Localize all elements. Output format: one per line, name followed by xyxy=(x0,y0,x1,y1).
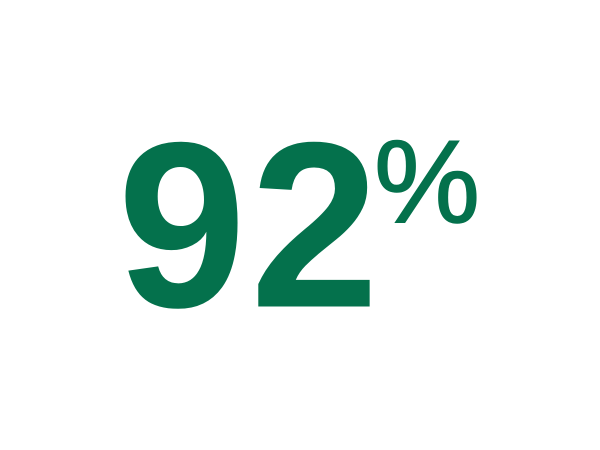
number 92: 9 xyxy=(118,92,246,357)
number 92: 2 xyxy=(250,92,379,357)
percent sign: % xyxy=(374,116,480,248)
statistic: 92 percent xyxy=(118,92,480,357)
